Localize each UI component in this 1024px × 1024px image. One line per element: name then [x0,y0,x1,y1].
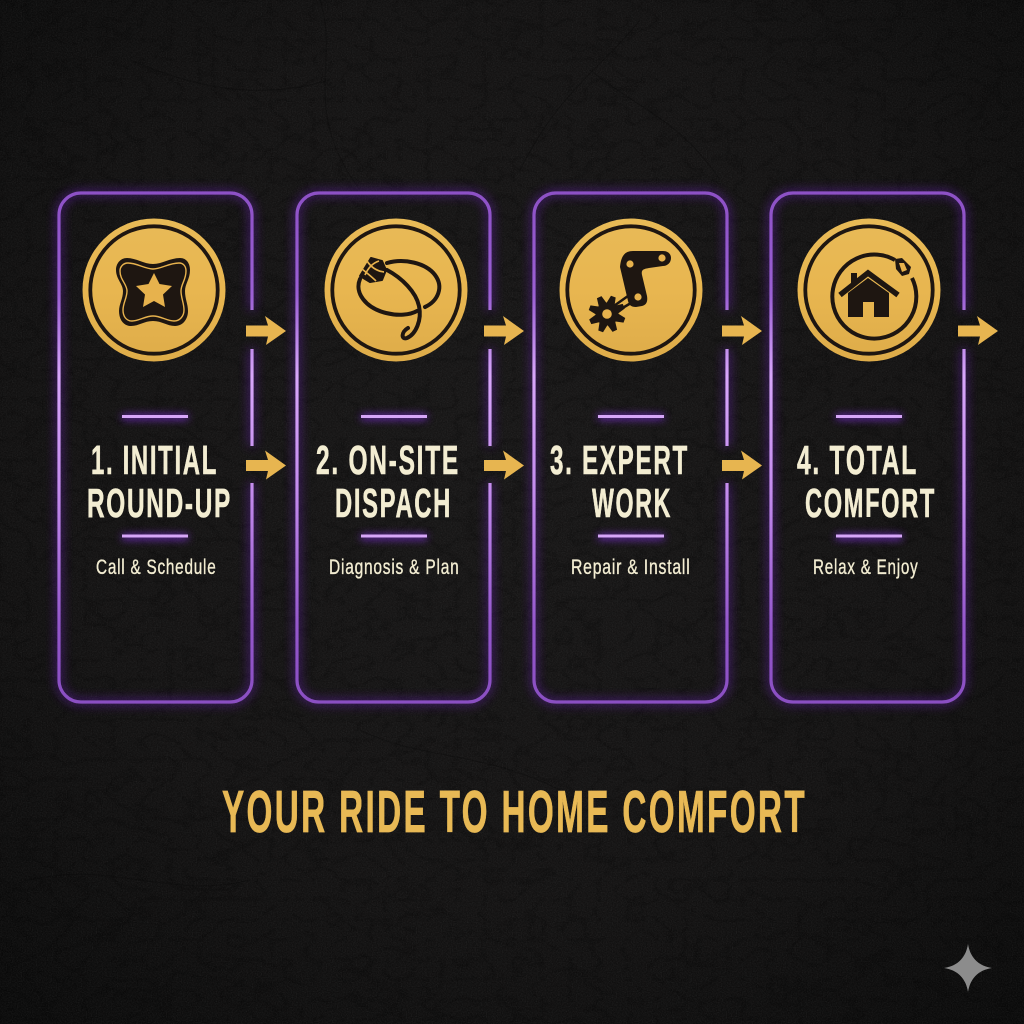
heading: 3. EXPERT [550,437,689,483]
panel: step 4 [771,193,964,702]
heading: 1. INITIAL [91,437,218,483]
icon: spur [560,218,702,362]
heading line 2: DISPACH [335,480,452,526]
icon: sparkle watermark [944,944,992,992]
arrow row: lower arrows [246,450,762,480]
heading line 2: COMFORT [805,480,936,526]
caption: Call & Schedule [96,556,216,579]
divider [122,414,188,420]
icon: lasso [324,218,468,362]
divider [122,534,188,540]
heading: 2. ON-SITE [316,437,460,483]
heading line 2: WORK [592,480,672,526]
icon: house in lasso [798,218,940,362]
divider [598,534,664,540]
divider [836,534,902,540]
divider [598,414,664,420]
icon: sheriff badge [82,218,226,362]
arrow row: upper arrows [246,316,998,345]
divider [361,534,427,540]
panel: step 3 [534,193,727,702]
panel: step 1 [59,193,252,702]
panel: step 2 [297,193,490,702]
heading line 2: ROUND-UP [87,480,232,526]
divider [836,414,902,420]
caption: Relax & Enjoy [813,556,918,579]
heading: 4. TOTAL [797,437,918,483]
caption: Diagnosis & Plan [329,556,460,579]
divider [361,414,427,420]
caption: Repair & Install [571,556,690,579]
